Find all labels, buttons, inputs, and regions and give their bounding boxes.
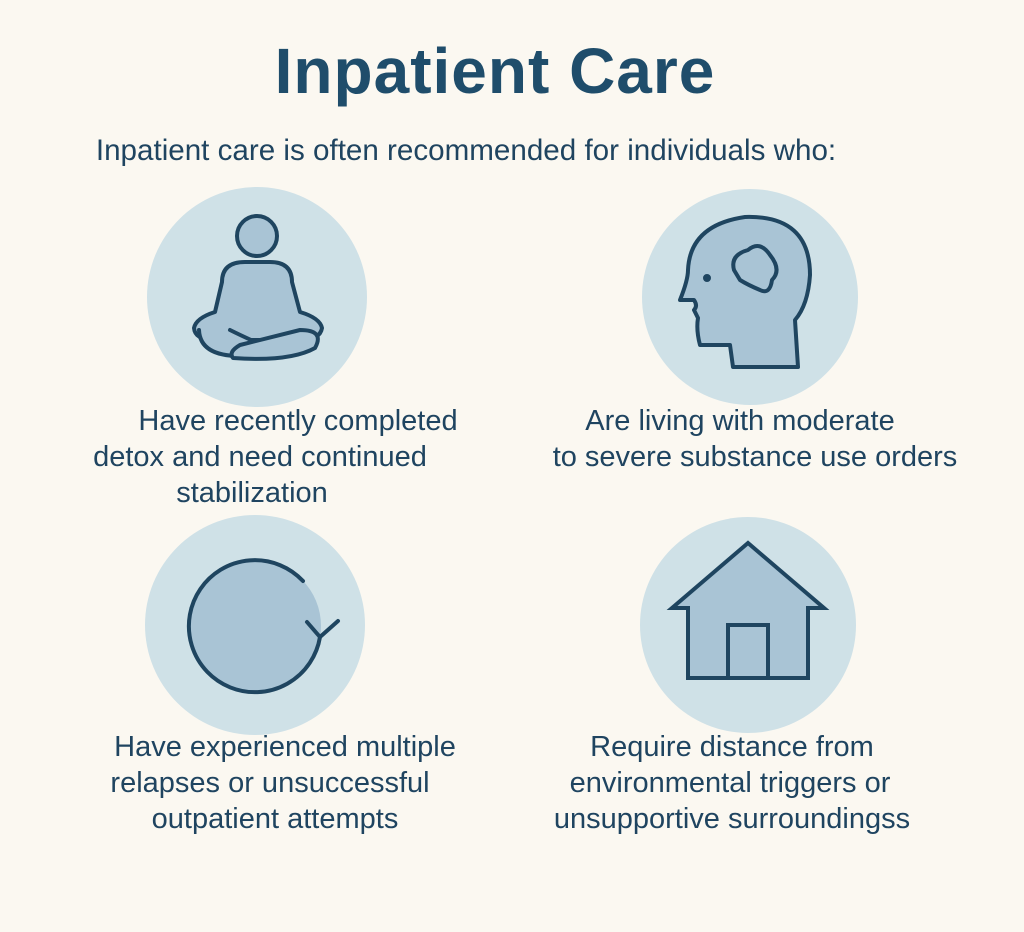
text: detox bbox=[93, 405, 458, 509]
text: relapses bbox=[110, 731, 456, 835]
text: detox: Have recently completed bbox=[138, 405, 458, 437]
text: triggers: environmental triggers or bbox=[570, 767, 890, 799]
icon: house bbox=[640, 517, 856, 733]
text: relapses: relapses or unsuccessful bbox=[110, 767, 430, 799]
text: substance use: Are living with moderate bbox=[585, 405, 895, 437]
text: relapses: Have experienced multiple bbox=[114, 731, 456, 763]
icon: meditation bbox=[147, 187, 367, 407]
text: triggers: Require distance from bbox=[590, 731, 874, 763]
text: triggers bbox=[554, 731, 910, 835]
text: detox: stabilization bbox=[176, 477, 328, 509]
text: substance use: to severe substance use orders bbox=[553, 441, 957, 473]
icon: head bbox=[642, 189, 858, 405]
text: detox: detox and need continued bbox=[93, 441, 427, 473]
text: substance use bbox=[553, 405, 957, 473]
text: triggers: unsupportive surroundingss bbox=[554, 803, 910, 835]
icon: cycle arrow bbox=[145, 515, 365, 735]
subtitle: Inpatient care is often recommended for individuals who: bbox=[96, 134, 836, 167]
text: relapses: outpatient attempts bbox=[152, 803, 398, 835]
title: Inpatient Care bbox=[275, 35, 715, 107]
